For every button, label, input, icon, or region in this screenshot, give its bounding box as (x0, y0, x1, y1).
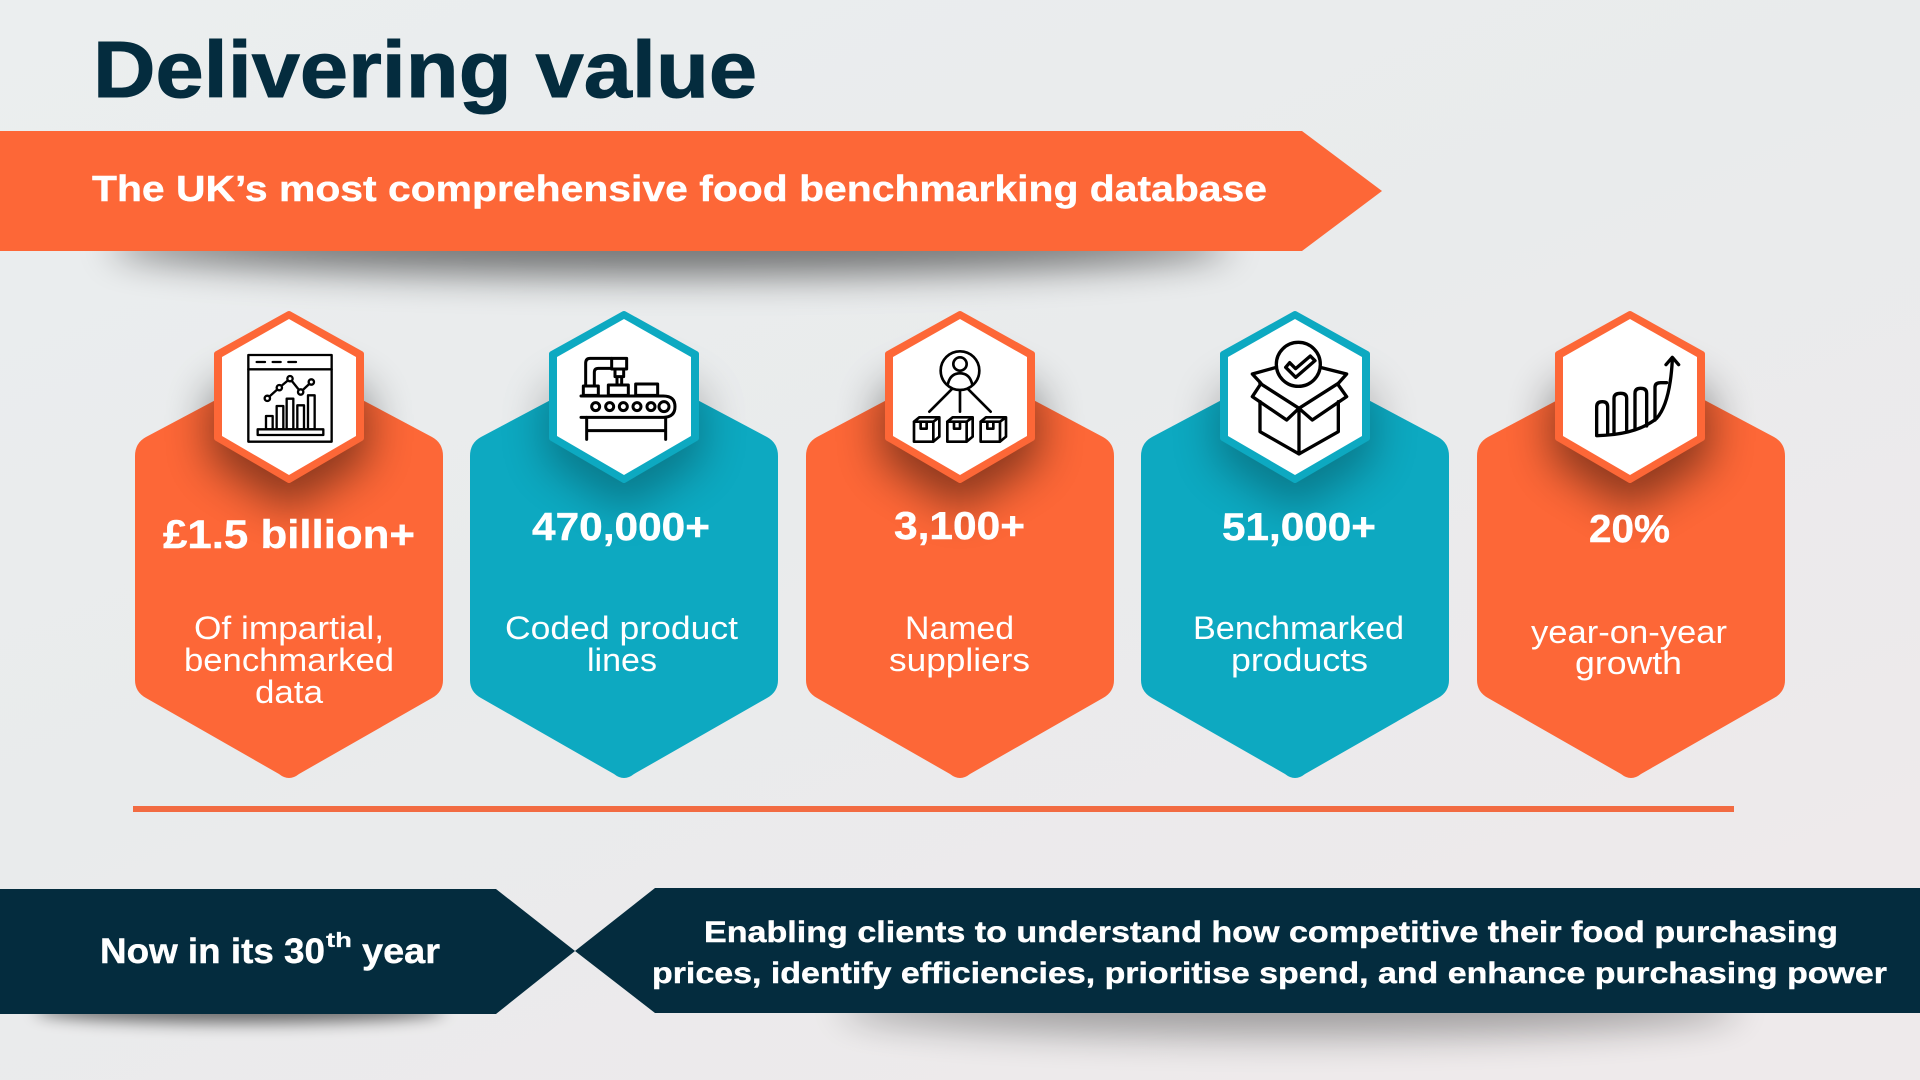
value: 51,000+ (1222, 506, 1376, 549)
icon shadow (210, 362, 368, 510)
icon: analytics chart window (248, 355, 332, 442)
title: Delivering value (93, 25, 757, 114)
banner: subtitle arrow (0, 131, 1382, 251)
description: benchmarked (184, 642, 394, 678)
icon badge (552, 314, 696, 480)
panel: 470,000+ (470, 314, 778, 778)
benefits text: prices, identify efficiencies, prioritise spend, and enhance purchasing power (652, 957, 1887, 990)
icon badge (1558, 314, 1702, 480)
value: 3,100+ (894, 505, 1025, 548)
description: year-on-year (1531, 614, 1727, 650)
icon badge (1223, 314, 1367, 480)
panel: 51,000+ (1141, 314, 1449, 778)
description: Benchmarked (1193, 610, 1404, 646)
panel: 3,100+ (806, 314, 1114, 778)
description: growth (1575, 645, 1682, 681)
description: data (255, 674, 323, 710)
shadow: right footer band (840, 980, 1740, 1036)
hexagon background (806, 361, 1114, 778)
panel: 20% (1477, 314, 1785, 778)
banner: subtitle arrow: The UK’s most comprehensive food benchmarking database (92, 168, 1267, 209)
description (505, 610, 738, 678)
icon: supplier network (914, 351, 1006, 442)
icon shadow (881, 362, 1039, 510)
icon: conveyor robot arm (581, 358, 675, 439)
benefits text: Enabling clients to understand how competitive their food purchasing (704, 916, 1838, 949)
icon: growth bars with arrow (1597, 357, 1679, 436)
description: Coded product (505, 610, 738, 646)
icon badge (888, 314, 1032, 480)
icon badge (217, 314, 361, 480)
value: £1.5 billion+ (163, 513, 415, 557)
banner shadow (110, 216, 1230, 276)
description (184, 610, 394, 710)
hexagon background (470, 361, 778, 778)
footer label (100, 930, 440, 971)
icon shadow (545, 362, 703, 510)
footer band: client benefits (575, 888, 1920, 1013)
description: Of impartial, (194, 610, 384, 646)
value: 470,000+ (532, 506, 710, 549)
hexagon background (1141, 361, 1449, 778)
description (889, 610, 1030, 678)
description (1531, 614, 1727, 681)
description: lines (587, 642, 657, 678)
value: 20% (1589, 508, 1670, 551)
description: products (1231, 642, 1368, 678)
icon shadow (1216, 362, 1374, 510)
description: Named (905, 610, 1014, 646)
divider line (133, 806, 1734, 812)
footer label: th (326, 930, 352, 952)
description: suppliers (889, 642, 1030, 678)
footer band: 30th year (0, 889, 575, 1014)
description (1193, 610, 1404, 678)
shadow: left footer band (35, 997, 445, 1023)
panel: £1.5 billion (135, 314, 443, 778)
hexagon background (135, 361, 443, 778)
icon: box with check mark (1252, 342, 1347, 454)
footer label: Now in its 30 (100, 932, 325, 971)
benefits text (652, 916, 1887, 990)
icon shadow (1552, 362, 1710, 510)
footer label: year (362, 932, 440, 971)
hexagon background (1477, 361, 1785, 778)
